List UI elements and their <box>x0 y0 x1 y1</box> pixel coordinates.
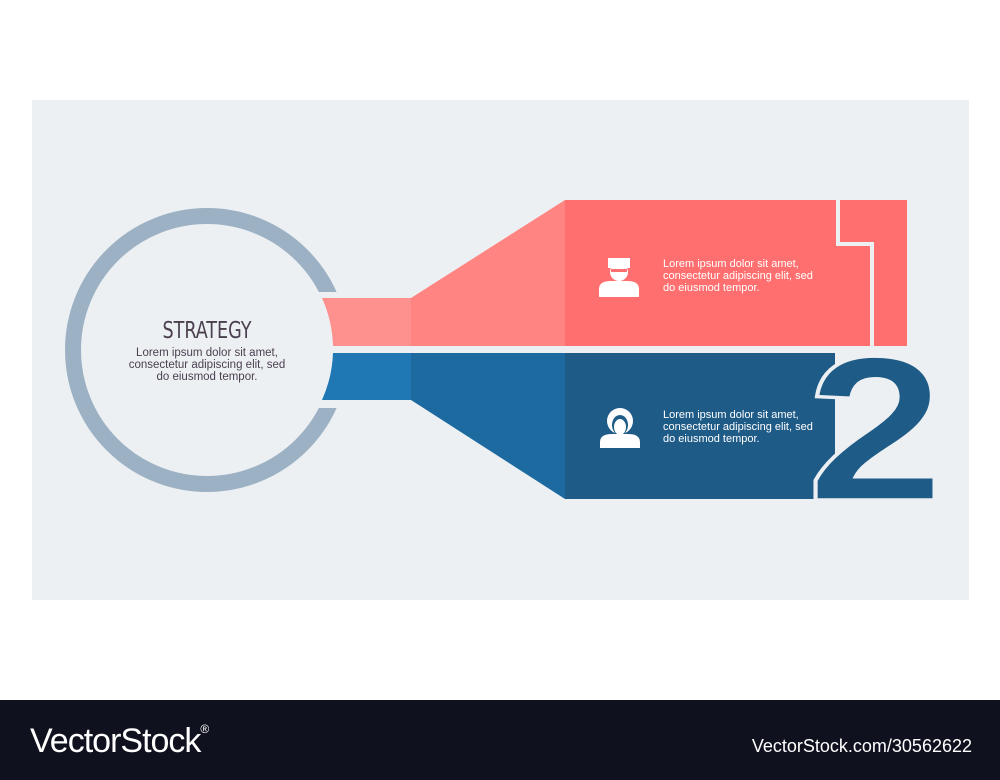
band 2: blue <box>322 314 944 544</box>
text 2: consectetur adipiscing elit, sed <box>663 421 813 433</box>
strategy heading: STRATEGY <box>162 318 252 344</box>
footer bar <box>0 700 1000 780</box>
strategy text: Lorem ipsum dolor sit amet, <box>136 347 278 359</box>
text 1: do eiusmod tempor. <box>663 282 760 294</box>
icon: person 2 <box>600 408 640 448</box>
strategy text: do eiusmod tempor. <box>156 371 258 383</box>
text 2: do eiusmod tempor. <box>663 433 760 445</box>
icon: person 1 <box>599 258 639 297</box>
number 2: 2 <box>807 314 944 544</box>
text 2: Lorem ipsum dolor sit amet, <box>663 409 799 421</box>
ring: strategy <box>73 216 360 484</box>
footer logo: VectorStock® <box>30 722 208 760</box>
text 2 <box>663 409 813 445</box>
text 1 <box>663 258 813 294</box>
band 1: red <box>322 200 907 348</box>
background panel <box>32 100 969 600</box>
footer url: VectorStock.com/30562622 <box>752 736 972 756</box>
text 1: Lorem ipsum dolor sit amet, <box>663 258 799 270</box>
strategy text: consectetur adipiscing elit, sed <box>129 359 285 371</box>
number 1 outline <box>838 200 872 348</box>
text 1: consectetur adipiscing elit, sed <box>663 270 813 282</box>
strategy text <box>129 347 285 383</box>
